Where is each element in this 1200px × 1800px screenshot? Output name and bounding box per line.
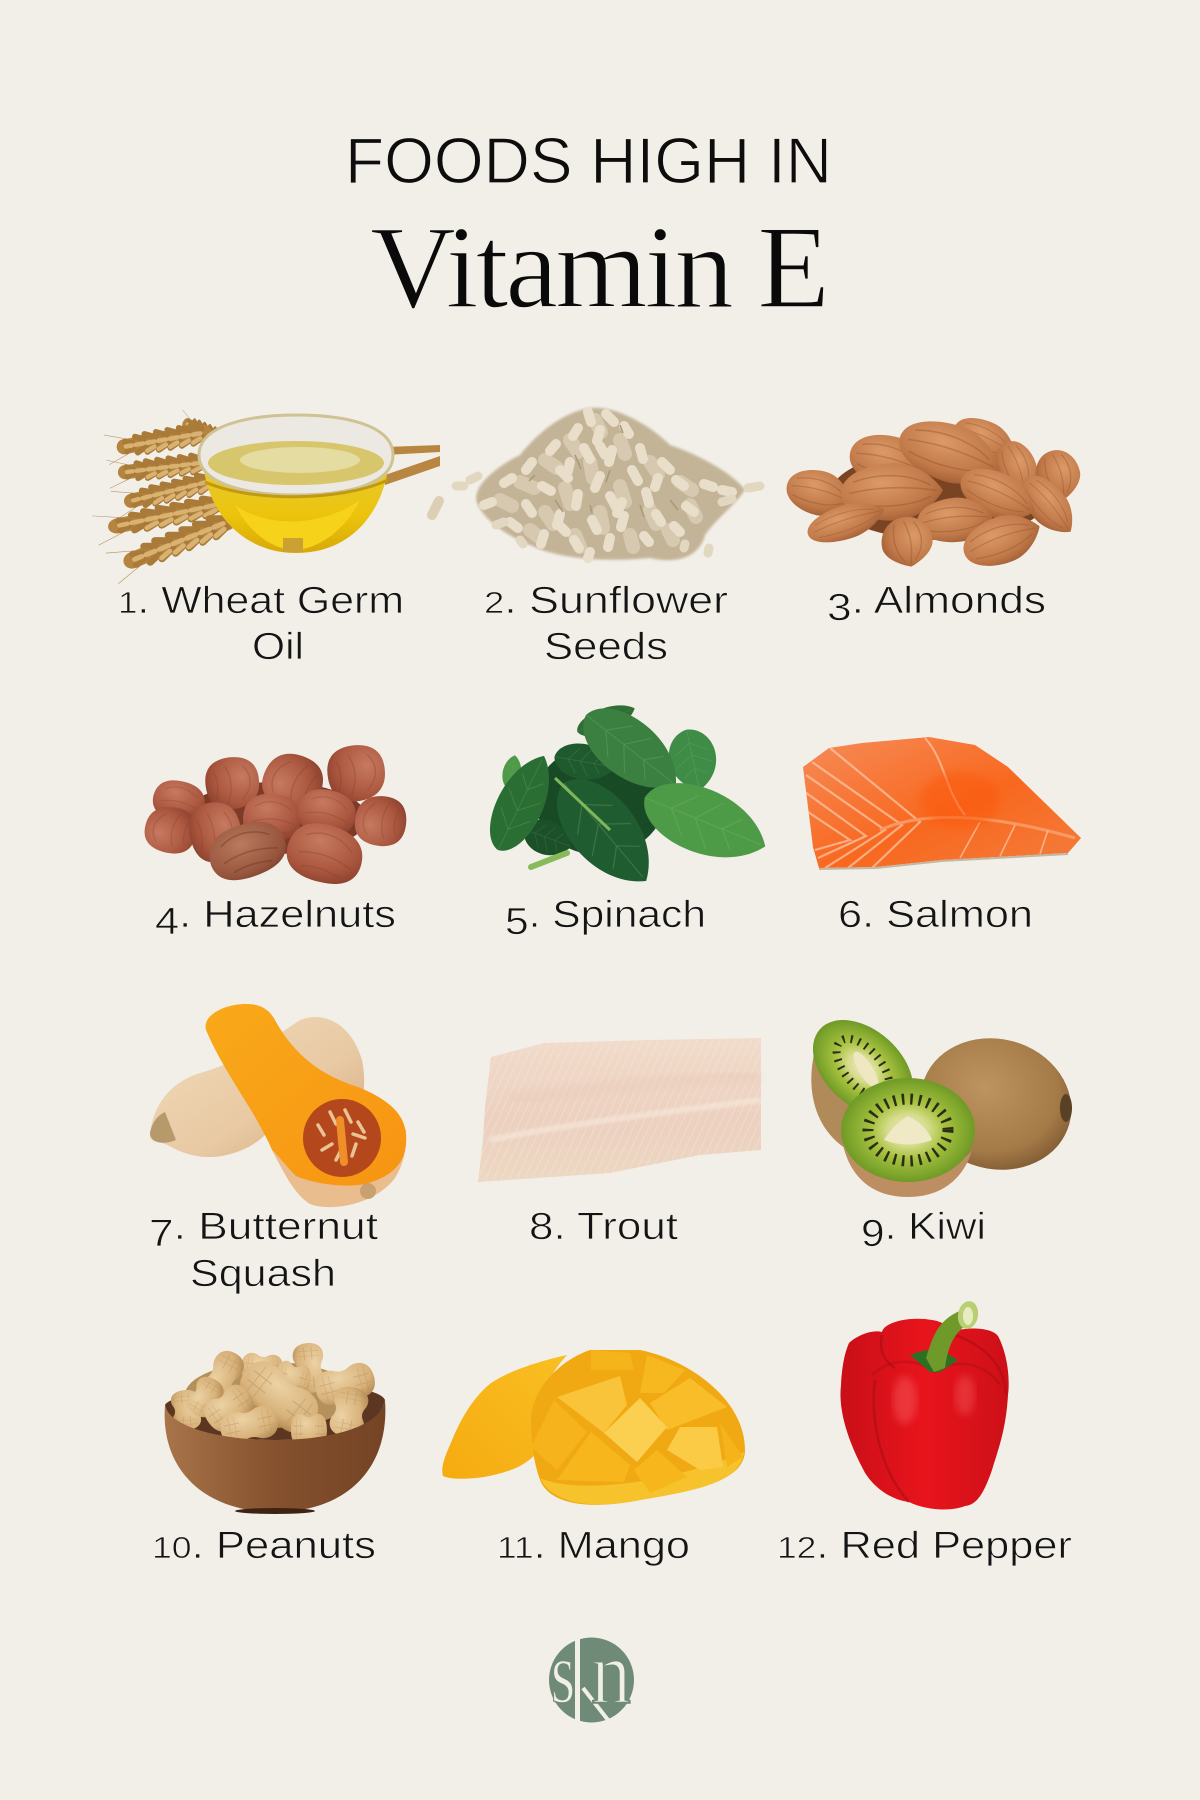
item 5: spinach bbox=[477, 692, 777, 943]
label: 7 bbox=[149, 1213, 174, 1255]
label: . Spinach bbox=[529, 894, 706, 936]
label bbox=[484, 580, 728, 668]
icon: salmon fillet bbox=[803, 737, 1081, 869]
item 3: almonds bbox=[781, 409, 1086, 629]
label: . Kiwi bbox=[885, 1206, 986, 1248]
label: 11. Mango bbox=[497, 1525, 690, 1567]
label bbox=[149, 1206, 379, 1295]
item 8: trout bbox=[478, 1038, 761, 1248]
logo letter s: s bbox=[551, 1625, 575, 1722]
title line: foods high in: FOODS HIGH IN bbox=[345, 124, 832, 197]
label bbox=[505, 894, 706, 943]
label: 8. Trout bbox=[529, 1206, 679, 1248]
seed: lone bbox=[432, 501, 439, 515]
label: . Butternut bbox=[174, 1206, 379, 1248]
label: 5 bbox=[505, 901, 529, 943]
title bbox=[345, 124, 832, 333]
label bbox=[827, 580, 1046, 629]
item 11: mango bbox=[442, 1350, 745, 1567]
label bbox=[118, 580, 404, 668]
item 7: butternut squash bbox=[149, 1004, 406, 1295]
icon: mango slices bbox=[442, 1350, 745, 1505]
label: 10. Peanuts bbox=[152, 1525, 376, 1567]
label: 3 bbox=[827, 587, 852, 629]
item 6: salmon bbox=[803, 737, 1081, 936]
item 12: red pepper bbox=[777, 1299, 1072, 1567]
icon: almond pile bbox=[781, 409, 1086, 576]
icon: wheat and bowl of oil bbox=[92, 410, 440, 584]
label: 12. Red Pepper bbox=[777, 1525, 1072, 1567]
label bbox=[155, 894, 396, 943]
icon: red bell pepper bbox=[840, 1299, 1009, 1509]
icon: kiwi fruit bbox=[794, 1001, 1086, 1197]
label: . Almonds bbox=[852, 580, 1046, 622]
icon: butternut squash halves bbox=[150, 1004, 406, 1207]
label: 1. Wheat Germ bbox=[118, 580, 404, 622]
label: 4 bbox=[155, 901, 179, 943]
label: Squash bbox=[190, 1253, 336, 1295]
item 1: wheat germ oil bbox=[92, 410, 440, 668]
item 4: hazelnuts bbox=[141, 741, 408, 943]
icon: spinach leaves bbox=[477, 692, 777, 902]
logo letter n: n bbox=[591, 1624, 631, 1723]
logo: skn monogram bbox=[549, 1624, 634, 1726]
label: 9 bbox=[861, 1213, 885, 1255]
label bbox=[861, 1206, 986, 1255]
label: 6. Salmon bbox=[838, 894, 1033, 936]
title line: vitamin e: Vitamin E bbox=[370, 201, 830, 333]
icon: seed pile bbox=[432, 408, 760, 560]
label: Oil bbox=[252, 626, 304, 668]
item 10: peanuts bbox=[152, 1342, 385, 1567]
label: . Hazelnuts bbox=[179, 894, 396, 936]
item 9: kiwi bbox=[794, 1001, 1086, 1255]
icon: bowl of peanuts bbox=[165, 1342, 385, 1514]
label: 2. Sunflower bbox=[484, 580, 728, 622]
label: Seeds bbox=[544, 626, 668, 668]
icon: hazelnut pile bbox=[141, 741, 408, 891]
item 2: sunflower seeds bbox=[432, 408, 760, 668]
icon: trout fillet bbox=[478, 1038, 761, 1182]
